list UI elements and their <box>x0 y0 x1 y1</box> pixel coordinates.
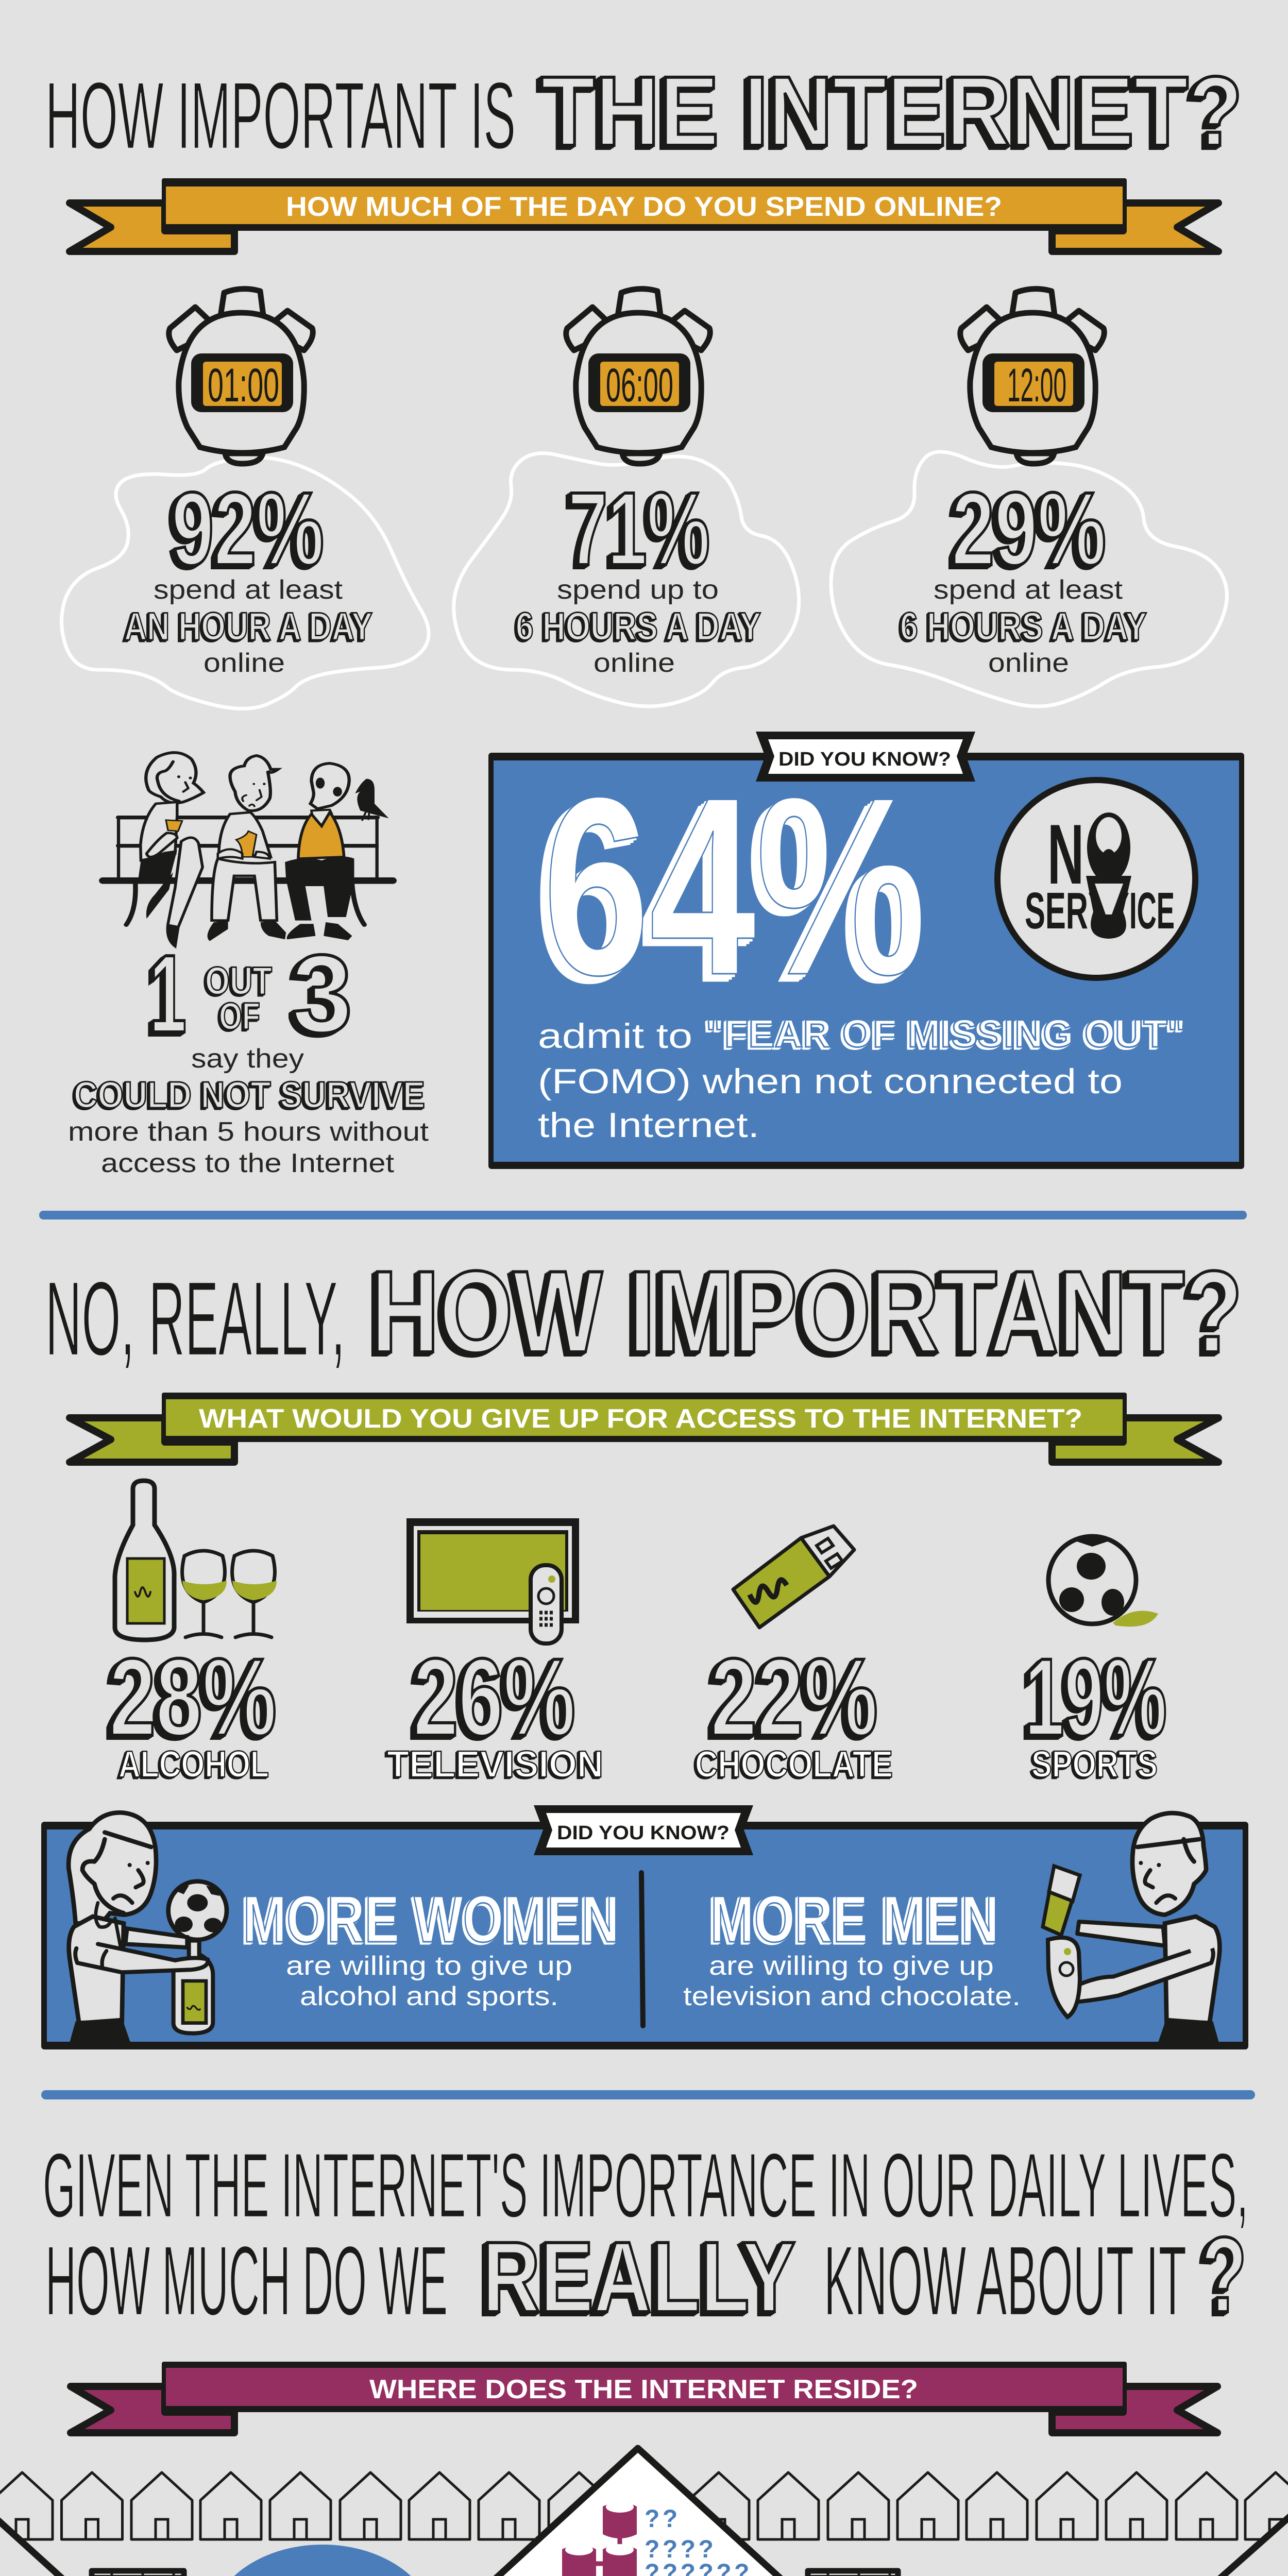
stat: 29 percent: online <box>988 648 1069 678</box>
stat: 92 percent: spend at least <box>154 575 343 605</box>
question marks: don't know <box>645 2505 962 2576</box>
stat: 19 percent sports: SPORTS <box>1031 1744 1158 1785</box>
body text <box>538 1012 1186 1145</box>
body text: admit to <box>538 1016 692 1056</box>
stat: 1 out of 3: COULD NOT SURVIVE <box>74 1075 425 1116</box>
stat: 26 percent television: TELEVISION <box>387 1744 603 1785</box>
stat: 1 out of 3: say they <box>191 1044 304 1074</box>
stat: 71 percent: 71% <box>568 470 710 587</box>
speech bubble: correct <box>209 2545 436 2576</box>
icon: chocolate bar <box>733 1526 854 1628</box>
text: more men: television and chocolate. <box>683 1981 1021 2011</box>
text: more men <box>683 1883 1021 2011</box>
panel: did you know 64 percent <box>488 732 1244 1169</box>
left chimney <box>92 2571 184 2576</box>
illustration: woman with ball and bottle <box>69 1812 227 2043</box>
icon: no service: N <box>1047 807 1084 902</box>
body text: "FEAR OF MISSING OUT" <box>706 1012 1186 1056</box>
text: more men: MORE MEN <box>710 1883 999 1956</box>
stat: 29 percent: spend at least <box>934 575 1123 605</box>
icon: no service <box>997 780 1195 978</box>
text: more women: are willing to give up <box>286 1951 572 1981</box>
stat: 1 out of 3: access to the Internet <box>101 1148 395 1178</box>
stat: 92 percent: 01:00 <box>208 359 279 412</box>
title: how important is the internet: HOW IMPORTANT IS <box>45 63 516 169</box>
body text: the Internet. <box>538 1106 759 1145</box>
stat: 92 percent: 92% <box>172 470 324 587</box>
tag: did you know <box>756 732 975 782</box>
stat: 29 percent: 29% <box>952 470 1106 587</box>
stat: 1 out of 3: 3 <box>292 931 352 1056</box>
title: no really how important: NO, REALLY, <box>45 1260 345 1378</box>
illustration: three people on a bench <box>103 753 393 947</box>
stat: 1 out of 3: 1 <box>149 931 187 1056</box>
text: more women <box>243 1883 619 2011</box>
stat: 71 percent: spend up to <box>557 575 719 605</box>
tag: did you know: DID YOU KNOW? <box>778 749 951 770</box>
tag: did you know: DID YOU KNOW? <box>557 1822 730 1844</box>
stat: 19 percent sports: 19% <box>1025 1636 1167 1759</box>
tag: did you know <box>534 1805 753 1855</box>
question marks: don't know: ?? <box>645 2505 681 2533</box>
magenta ribbon heading: WHERE DOES THE INTERNET RESIDE? <box>369 2375 918 2404</box>
text: more women: alcohol and sports. <box>300 1981 558 2011</box>
left neighbouring house <box>0 2513 267 2576</box>
stat: 1 out of 3 <box>68 931 429 1178</box>
stat: 1 out of 3: OUT <box>205 959 272 1003</box>
right chimney <box>808 2571 898 2576</box>
orange ribbon heading <box>70 178 1218 251</box>
icon: television and remote <box>406 1518 579 1643</box>
stat: 22 percent chocolate <box>695 1636 893 1785</box>
icon: no service: V <box>1088 882 1129 940</box>
stat: 92 percent <box>62 289 429 709</box>
title: given the internet's importance: REALLY <box>482 2221 795 2333</box>
stat: 1 out of 3: more than 5 hours without <box>68 1117 429 1147</box>
main house: where the internet resides <box>209 2448 984 2576</box>
green ribbon heading: WHAT WOULD YOU GIVE UP FOR ACCESS TO THE INTERNET? <box>199 1404 1082 1434</box>
stat: 71 percent <box>454 289 799 706</box>
icon: football <box>1048 1536 1158 1626</box>
right neighbouring house <box>1010 2509 1288 2576</box>
stat: 71 percent: online <box>594 648 675 678</box>
text: more men: are willing to give up <box>709 1951 994 1981</box>
icon: wine bottle and glasses <box>115 1481 277 1640</box>
stat: 28 percent alcohol: 28% <box>109 1636 277 1759</box>
stat: 71 percent: 6 HOURS A DAY <box>516 605 761 649</box>
stat: 26 percent television: 26% <box>413 1636 575 1759</box>
big number 64 percent: 64% <box>543 745 926 1028</box>
stat: 22 percent chocolate: 22% <box>710 1636 878 1759</box>
stat: 29 percent: 6 HOURS A DAY <box>900 605 1147 649</box>
title: given the internet's importance: ? <box>1201 2215 1247 2335</box>
title: given the internet's importance <box>43 2134 1248 2336</box>
title: no really how important <box>45 1246 1243 1378</box>
text: more women: MORE WOMEN <box>243 1883 619 1956</box>
stat: 29 percent: 12:00 <box>1007 359 1066 412</box>
panel: did you know more women more men <box>41 1805 1248 2049</box>
question marks: don't know: ???? <box>645 2536 716 2563</box>
magenta ribbon heading <box>71 2362 1217 2433</box>
stat: 29 percent <box>831 289 1227 706</box>
body text: (FOMO) when not connected to <box>538 1062 1123 1101</box>
icon: no service: ICE <box>1129 882 1175 940</box>
stat: 22 percent chocolate: CHOCOLATE <box>695 1744 893 1785</box>
row of small houses <box>0 2472 1288 2539</box>
stat: 1 out of 3: OF <box>219 995 260 1038</box>
stat: 28 percent alcohol: ALCOHOL <box>118 1744 269 1785</box>
data centre cylinders <box>318 2501 637 2576</box>
green ribbon heading <box>70 1393 1218 1462</box>
title: given the internet's importance: HOW MUCH DO WE <box>45 2225 448 2336</box>
stat: 92 percent: online <box>204 648 285 678</box>
illustration: man with chocolate and remote <box>1043 1813 1219 2043</box>
stat: 92 percent: AN HOUR A DAY <box>124 605 372 649</box>
stat: 28 percent alcohol <box>109 1636 277 1785</box>
stat: 71 percent: 06:00 <box>606 359 673 412</box>
stat: 26 percent television <box>387 1636 603 1785</box>
icon: no service: O <box>1085 813 1132 885</box>
connectors between data centres <box>335 2521 620 2576</box>
orange ribbon heading: HOW MUCH OF THE DAY DO YOU SPEND ONLINE? <box>286 192 1002 222</box>
stat: 19 percent sports <box>1025 1636 1167 1785</box>
icon: no service: SER <box>1025 882 1088 940</box>
